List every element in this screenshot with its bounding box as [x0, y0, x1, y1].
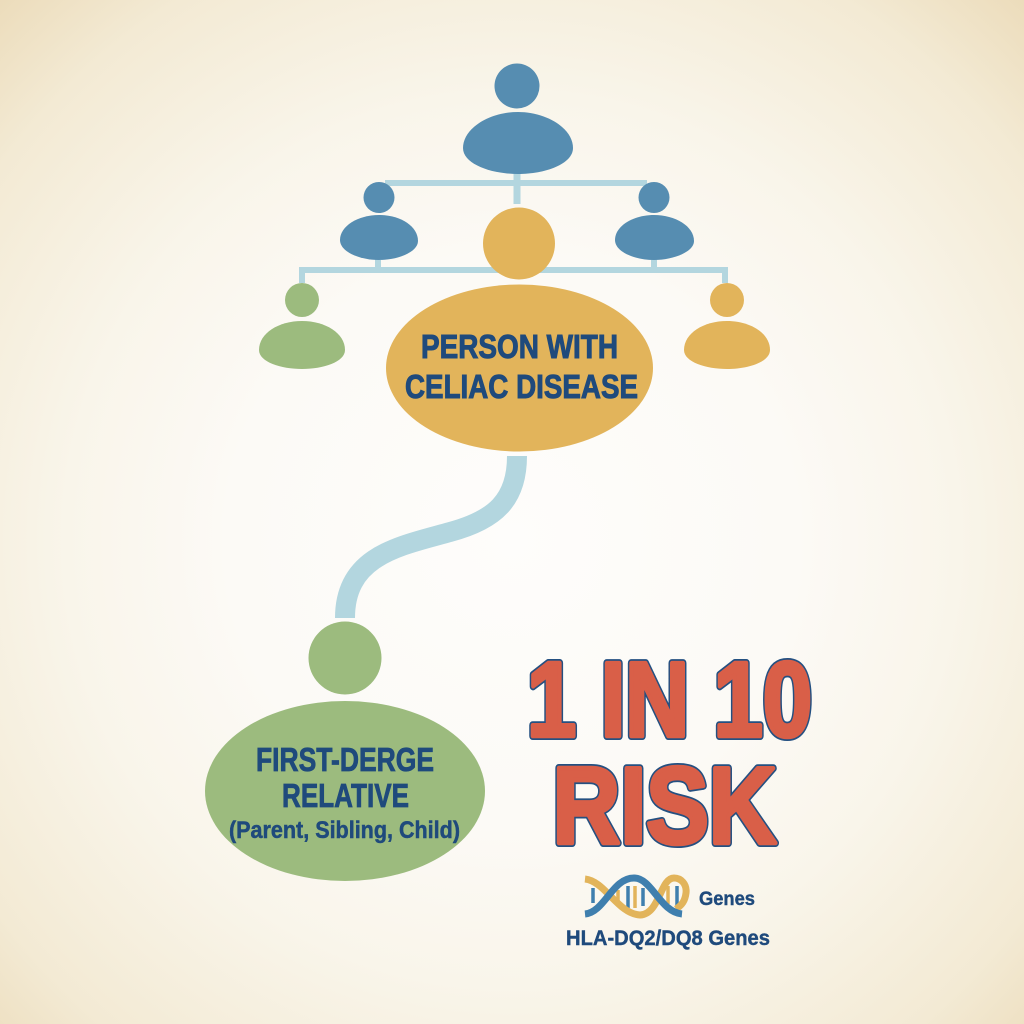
headline: 1 in 10 risk: RISK	[552, 745, 776, 867]
label: HLA-DQ2/DQ8 genes: HLA-DQ2/DQ8 Genes	[566, 927, 770, 950]
icon: top ancestor person	[463, 64, 573, 174]
panel: first-degree relative: (Parent, Sibling, Child)	[229, 817, 460, 844]
icon: middle right person	[615, 182, 694, 260]
panel: first-degree relative	[205, 622, 485, 881]
icon: middle left person	[340, 182, 418, 260]
headline: 1 in 10 risk: RISK	[552, 745, 776, 867]
family tree connector lines	[302, 172, 725, 283]
headline: 1 in 10 risk: 1 IN 10	[527, 641, 812, 759]
icon: lower right gold person	[684, 283, 770, 369]
headline: 1 in 10 risk: 1 IN 10	[527, 641, 812, 759]
headline: 1 in 10 risk	[527, 641, 812, 867]
icon: DNA helix	[585, 878, 686, 915]
panel: person with celiac disease: PERSON WITH	[421, 328, 618, 365]
panel: first-degree relative: RELATIVE	[282, 777, 409, 814]
panel: first-degree relative: FIRST-DERGE	[256, 741, 434, 778]
panel: person with celiac disease: CELIAC DISEASE	[405, 368, 638, 405]
label: genes: Genes	[699, 889, 755, 910]
arrow: curved connector to relative	[345, 456, 517, 618]
icon: lower left green person	[259, 283, 345, 369]
panel: person with celiac disease	[386, 208, 653, 452]
